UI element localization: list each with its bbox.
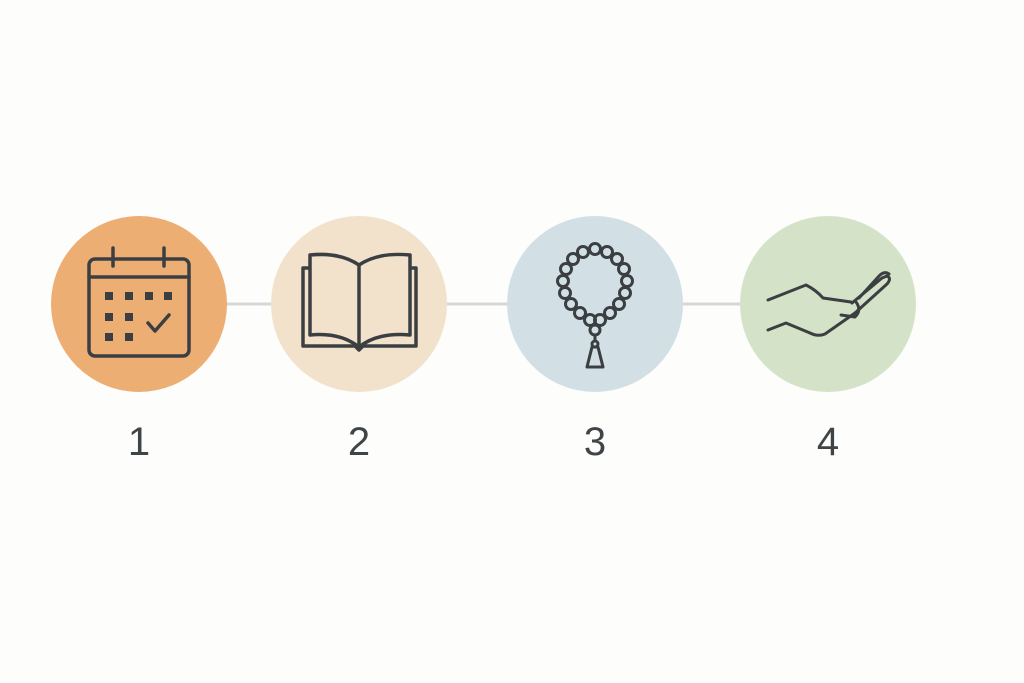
icon: calendar — [89, 248, 189, 356]
step 4: open hand — [740, 216, 916, 392]
step 1: calendar — [51, 216, 227, 392]
label 1: 1 — [128, 420, 150, 464]
icon: open book — [303, 254, 416, 350]
step 3: prayer beads — [507, 216, 683, 392]
label 4: 4 — [817, 420, 839, 464]
number labels — [128, 420, 839, 464]
step 2: book — [271, 216, 447, 392]
label 2: 2 — [348, 420, 370, 464]
connector line — [139, 302, 828, 306]
label 3: 3 — [584, 420, 606, 464]
icon: hand — [768, 273, 890, 335]
icon: beads — [558, 244, 632, 367]
